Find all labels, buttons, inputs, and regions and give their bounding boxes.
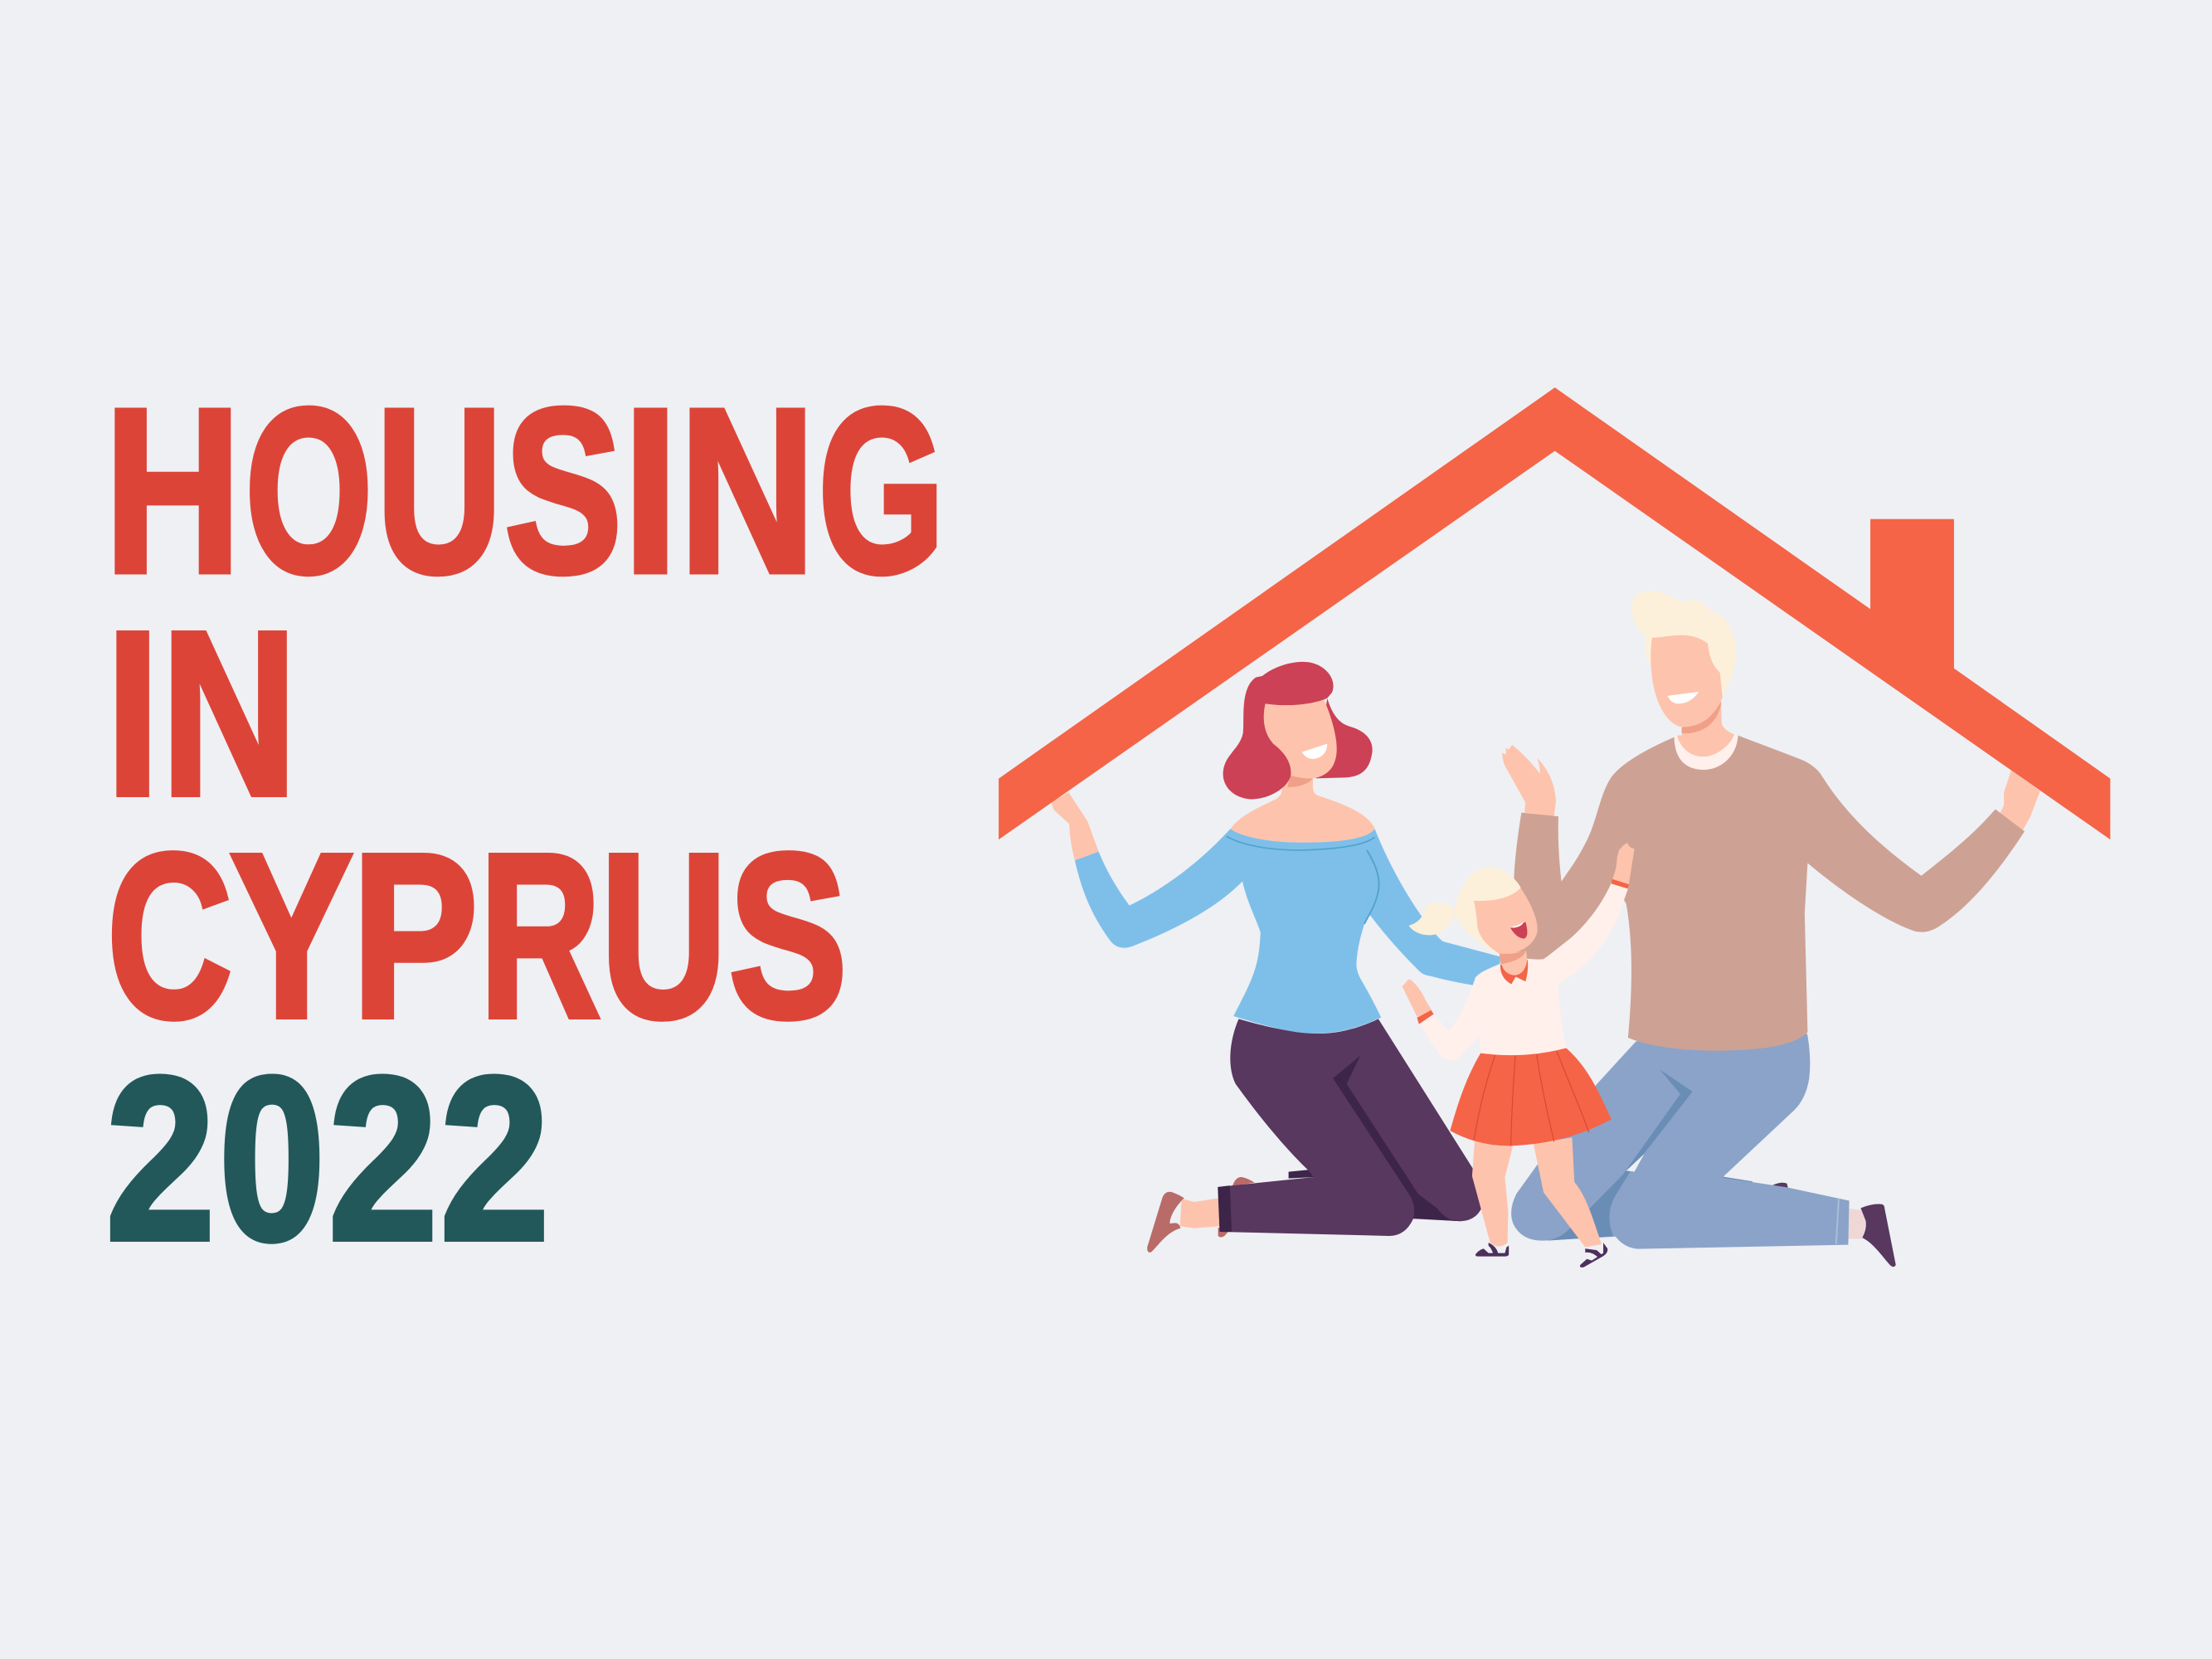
girl: cuffs	[1612, 879, 1629, 888]
girl: shoes	[1475, 1243, 1509, 1257]
title line: CYPRUS: Y	[230, 805, 353, 1067]
title line: CYPRUS: C	[107, 805, 232, 1067]
title line: 2022: 2	[440, 1030, 549, 1289]
man: raised hand	[1502, 745, 1556, 816]
title line: IN: N	[161, 582, 297, 844]
woman: hair	[1223, 662, 1334, 799]
woman: mouth	[1302, 744, 1327, 759]
woman: blue top	[1075, 829, 1500, 1034]
man: legs and shoes	[1511, 1034, 1896, 1267]
man: face	[1650, 635, 1723, 727]
girl	[1403, 843, 1635, 1267]
woman: legs and shoes	[1147, 1019, 1481, 1253]
woman: face	[1264, 699, 1337, 779]
girl: neck	[1500, 951, 1527, 975]
girl: collar	[1500, 960, 1528, 984]
man: sweater	[1514, 736, 2025, 1051]
girl: legs	[1472, 1141, 1513, 1247]
man: mouth	[1668, 692, 1699, 703]
title line: HOUSING: G	[818, 360, 945, 621]
man: hand on roof	[2001, 771, 2040, 830]
title line: HOUSING: S	[504, 360, 622, 621]
girl: skirt	[1450, 1048, 1612, 1146]
title line: IN: I	[106, 582, 160, 844]
girl: hair back and ponytail	[1456, 867, 1520, 954]
woman: neck and chest	[1230, 778, 1375, 843]
title line: CYPRUS: U	[600, 805, 727, 1067]
title line: CYPRUS: S	[729, 805, 848, 1067]
girl: mouth	[1510, 922, 1527, 938]
woman: hair back	[1316, 698, 1373, 778]
man: undershirt collar	[1675, 735, 1738, 770]
woman: upper body	[1052, 662, 1500, 1034]
title line: CYPRUS: P	[352, 805, 478, 1067]
title	[105, 360, 945, 1289]
girl: hands	[1612, 843, 1635, 884]
man: neck	[1677, 701, 1734, 757]
woman: hand on roof	[1052, 792, 1099, 860]
man: upper body	[1502, 591, 2040, 1051]
title line: 2022: 2	[106, 1030, 215, 1289]
title line: HOUSING: H	[105, 360, 241, 621]
title line: CYPRUS: R	[479, 805, 600, 1067]
man: hair	[1631, 591, 1736, 698]
title line: HOUSING: O	[245, 360, 372, 621]
title line: HOUSING: N	[679, 360, 815, 621]
roof with chimney	[999, 387, 2110, 839]
title line: 2022: 2	[328, 1030, 438, 1289]
title line: 2022: 0	[219, 1030, 325, 1289]
girl: blouse	[1420, 883, 1629, 1061]
illustration: family under a roof	[999, 387, 2110, 1267]
title line: HOUSING: I	[623, 360, 678, 621]
title line: HOUSING: U	[377, 360, 503, 621]
girl: face	[1474, 888, 1538, 954]
